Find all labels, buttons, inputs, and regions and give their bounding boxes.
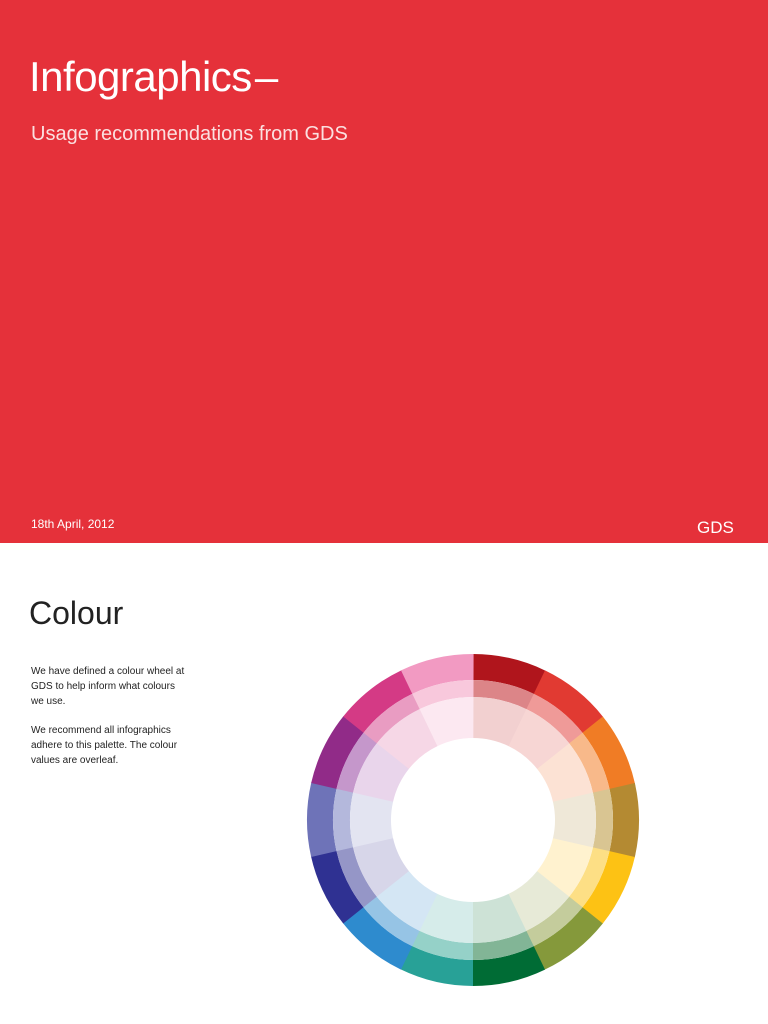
subtitle: Usage recommendations from GDS [31, 123, 348, 145]
body text: We recommend all infographics adhere to this palette. The colour values are overleaf. [31, 725, 177, 766]
header panel [0, 0, 768, 543]
section heading: Colour [29, 595, 123, 631]
body text [31, 666, 184, 766]
middle ring [288, 635, 658, 1005]
inner ring [329, 676, 617, 964]
logo text: GDS [697, 518, 734, 537]
title: – [255, 53, 278, 100]
body text: We have defined a colour wheel at GDS to help inform what colours we use. [31, 666, 184, 707]
date: 18th April, 2012 [31, 517, 114, 531]
title: Infographics [29, 53, 252, 100]
outer ring [258, 605, 688, 1024]
